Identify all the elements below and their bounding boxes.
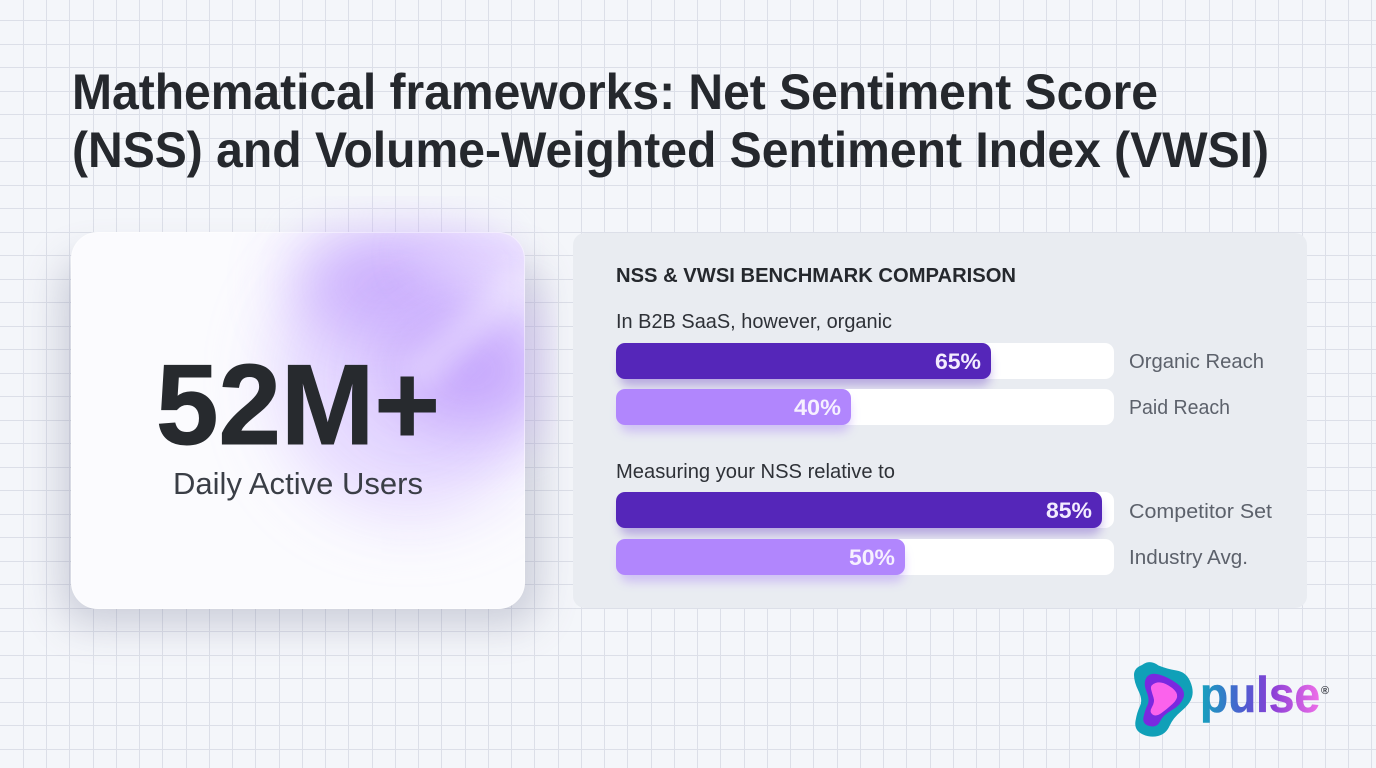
panel: stat card <box>60 220 550 626</box>
bar: organic reach 65% <box>616 343 1264 386</box>
panel: benchmark comparison <box>573 233 1307 608</box>
stat value: 52M+ <box>156 342 440 469</box>
wordmark: pulse <box>1200 667 1320 723</box>
title: Mathematical frameworks: Net Sentiment Score <box>72 64 1158 120</box>
registered mark: ® <box>1321 685 1329 697</box>
panel heading: NSS & VWSI BENCHMARK COMPARISON <box>616 265 1016 287</box>
card glow and shadow <box>60 220 543 626</box>
bar: paid reach 40%: 40% <box>794 395 841 420</box>
bar: competitor set 85% <box>616 492 1272 535</box>
group label: relative: Measuring your NSS relative to <box>616 461 895 483</box>
bar: industry avg 50%: 50% <box>849 545 895 570</box>
bar: paid reach 40%: Paid Reach <box>1129 397 1230 419</box>
icon: pulse blob <box>1134 662 1193 737</box>
stat label: Daily Active Users <box>173 466 423 501</box>
card border <box>72 232 524 608</box>
bar: organic reach 65%: Organic Reach <box>1129 351 1264 373</box>
bar: competitor set 85%: 85% <box>1046 498 1092 523</box>
bar: industry avg 50%: Industry Avg. <box>1129 547 1248 569</box>
title: (NSS) and Volume-Weighted Sentiment Index (VWSI) <box>72 122 1269 178</box>
bar: paid reach 40% <box>616 389 1230 432</box>
card surface <box>71 225 550 609</box>
logo: pulse <box>1134 662 1329 737</box>
group label: organic: In B2B SaaS, however, organic <box>616 311 892 333</box>
bar: organic reach 65%: 65% <box>935 349 981 374</box>
bar: competitor set 85%: Competitor Set <box>1129 501 1272 523</box>
panel background <box>573 233 1307 608</box>
bar: industry avg 50% <box>616 539 1248 582</box>
title <box>72 64 1269 178</box>
